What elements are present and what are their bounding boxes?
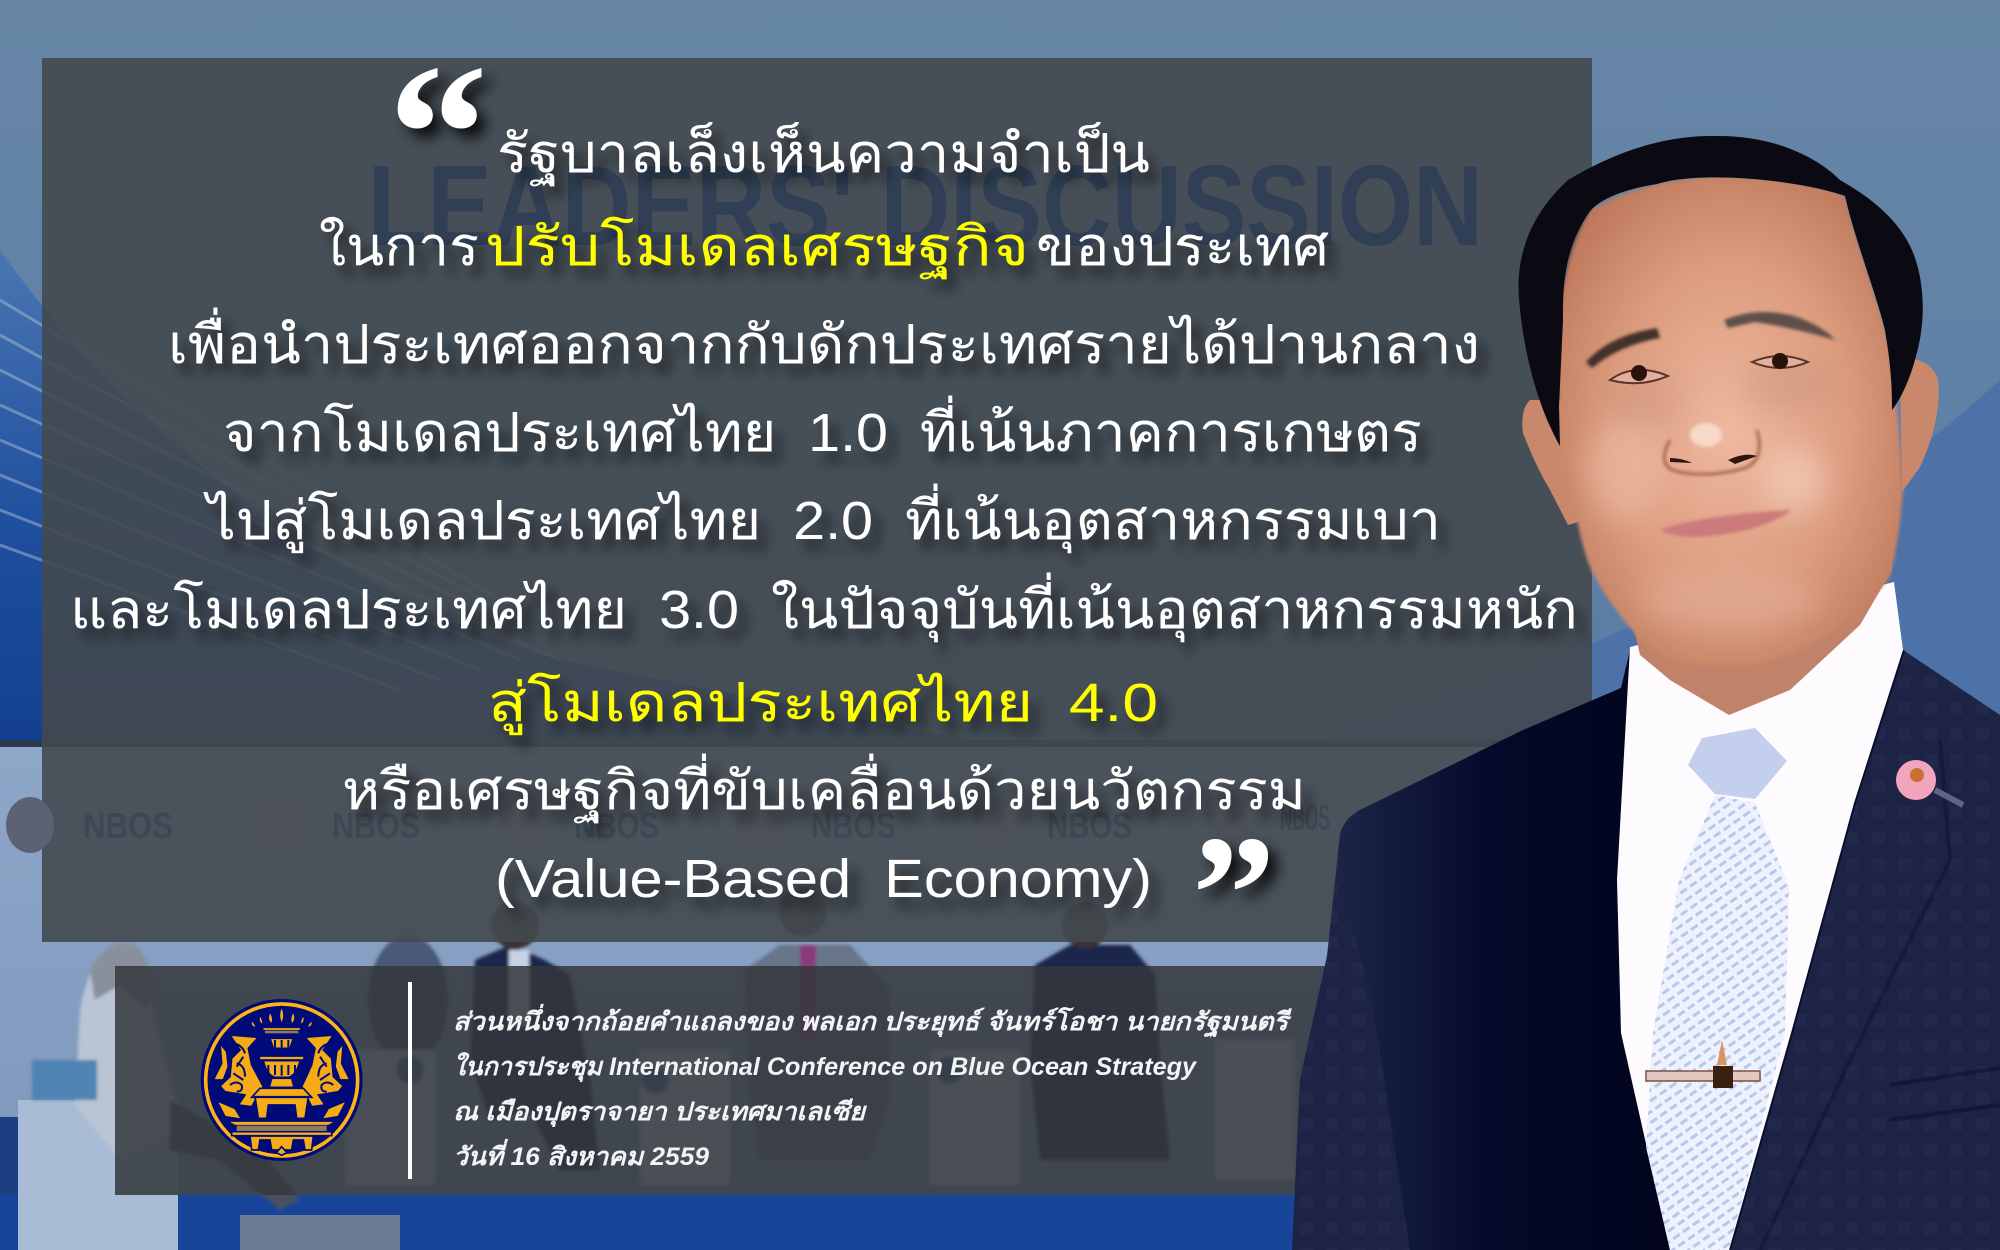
ghost stage logos: NBOS — [811, 805, 896, 846]
ghost stage logos: NBOS — [83, 805, 173, 846]
caption text — [453, 1003, 1292, 1171]
opening quotation mark: “ — [388, 24, 488, 245]
seal: left lion — [213, 1035, 263, 1119]
quote line 4: จากโมเดลประเทศไทย 1.0 ที่เน้นภาคการเกษตร — [223, 395, 1422, 463]
portrait: right lapel edge and pocket — [1729, 650, 2000, 1250]
caption line 3: ณ เมืองปุตราจายา ประเทศมาเลเซีย — [453, 1098, 868, 1127]
lower caption panel — [115, 966, 1415, 1195]
seal: base — [232, 1132, 332, 1150]
portrait: hair — [1518, 136, 1923, 446]
portrait: suit jacket — [1292, 590, 2000, 1250]
divider line — [408, 982, 412, 1179]
portrait of the prime minister — [1292, 136, 2000, 1250]
closing quotation mark: ” — [1192, 802, 1276, 987]
seal: table — [227, 1088, 337, 1126]
portrait: face shading — [1587, 361, 1840, 630]
portrait: tie clip — [1646, 1040, 1760, 1088]
portrait: eyebrows — [1586, 312, 1835, 368]
caption line 4: วันที่ 16 สิงหาคม 2559 — [453, 1138, 709, 1171]
quote line 9: (Value-Based Economy) — [495, 849, 1152, 909]
quote line 3: เพื่อนำประเทศออกจากกับดักประเทศรายได้ปานกลาง — [168, 307, 1480, 375]
quote line 5: ไปสู่โมเดลประเทศไทย 2.0 ที่เน้นอุตสาหกรรมเบา — [203, 483, 1441, 554]
ghost stage logos — [6, 797, 1330, 853]
ghost stage logos: NBOS — [332, 805, 420, 846]
quote line 7 highlight: สู่โมเดลประเทศไทย 4.0 — [488, 672, 1158, 735]
seal: flames — [251, 1007, 312, 1028]
quote line 1: รัฐบาลเล็งเห็นความจำเป็น — [497, 122, 1150, 186]
quote line 6: และโมเดลประเทศไทย 3.0 ในปัจจุบันที่เน้นอุตสาหกรรมหนัก — [70, 572, 1578, 643]
main quote panel — [42, 58, 1592, 942]
portrait: ears — [1522, 358, 1939, 525]
portrait: nose — [1664, 423, 1759, 474]
text: NBOS — [1280, 797, 1330, 838]
ghost stage logos: NBOS — [574, 805, 659, 846]
portrait: lapel pin — [1896, 760, 1963, 805]
quote text — [70, 122, 1578, 909]
portrait: tie — [1646, 728, 1789, 1250]
caption line 2: ในการประชุม International Conference on Blue Ocean Strategy — [453, 1052, 1197, 1082]
seal: vase — [259, 1027, 304, 1087]
portrait: face — [1558, 177, 1903, 665]
portrait: eyes — [1610, 353, 1808, 383]
seal: right lion — [302, 1035, 350, 1119]
ghost stage title: LEADERS' DISCUSSION — [368, 143, 1483, 270]
icon: government seal — [201, 999, 363, 1161]
quote line 8: หรือเศรษฐกิจที่ขับเคลื่อนด้วยนวัตกรรม — [342, 753, 1306, 823]
seal: lion and vase detailing — [230, 1040, 333, 1092]
quote line 2: ในการ — [319, 216, 479, 277]
caption line 1: ส่วนหนึ่งจากถ้อยคำแถลงของ พลเอก ประยุทธ์ จันทร์โอชา นายกรัฐมนตรี — [453, 1003, 1292, 1038]
portrait: neck — [1630, 540, 1892, 715]
background: panel speakers — [32, 888, 1295, 1210]
portrait: shirt — [1617, 582, 1903, 1250]
quote line 2: ของประเทศ — [1036, 217, 1329, 277]
ghost stage logos: NBOS — [1047, 805, 1132, 846]
portrait: left jacket shadow — [1340, 650, 1670, 1250]
portrait: mouth — [1660, 510, 1792, 537]
quote line 2: ปรับโมเดลเศรษฐกิจ — [485, 216, 1029, 279]
quote line 2 — [319, 216, 1329, 279]
